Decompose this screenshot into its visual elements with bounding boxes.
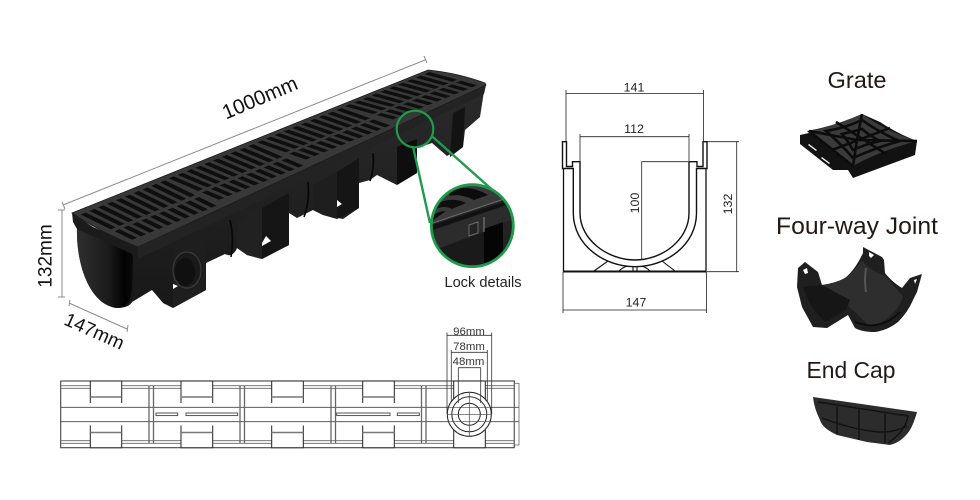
plan slots [156,413,419,416]
plan outline and longitudinal lines [61,381,519,448]
dimension line: length [62,56,427,209]
side rail [138,85,486,259]
dimension 100: 100 [628,193,642,213]
dimension 132: 132 [721,194,735,214]
outlet pipe socket [173,252,201,288]
label: 1000mm: 1000mm [219,72,301,124]
dimension 96mm: 96mm [453,326,485,338]
dimension 141: 141 [624,80,644,94]
grate slots [96,75,471,236]
dimension 147 [563,272,706,313]
plan outlet circles [447,392,492,437]
plan leg tabs [90,381,485,448]
leg cut-out gaps [173,200,342,289]
outer frame [564,169,706,272]
icon: four-way joint [797,247,922,332]
U channel profile [562,142,707,267]
small highlight circle [397,111,433,147]
dimension 48mm [453,356,484,403]
icon: grate piece [800,114,917,178]
foot supports [594,261,675,271]
magnified lock view [432,186,512,266]
open channel end [77,228,133,308]
callout connector lines [413,136,497,223]
dimension 147: 147 [626,296,646,310]
dimension 100 [628,162,688,260]
dimension 78mm: 78mm [453,341,485,353]
icon: end cap [813,397,917,445]
plan tab inner bars [90,397,394,432]
dimension 48mm: 48mm [453,356,484,368]
grate top surface [72,70,486,247]
channel legs [173,107,465,308]
infographic canvas [38,56,938,448]
dimension line: width [69,300,128,332]
product photo: channel drain body with grate [72,70,486,308]
label: 132mm: 132mm [36,224,56,288]
base plate [563,270,706,272]
near-end lip [72,213,138,259]
channel body silhouette [77,85,485,308]
lock detail callout [397,111,515,268]
heading: Four-way Joint: Four-way Joint [776,213,938,240]
cross-section drawing [562,80,739,313]
dimension 132 [707,142,739,272]
plan view drawing [61,326,519,448]
dimension 78mm [451,341,487,402]
magnifier ring [431,185,513,267]
dimension 112: 112 [624,122,644,136]
dimension 141 [566,80,704,142]
plan cross bars [149,386,426,443]
body ribs [230,153,373,257]
label: 147mm: 147mm [61,310,127,354]
heading: End Cap: End Cap [806,357,896,383]
dimension 96mm [447,326,492,414]
dimension line: height [58,210,65,297]
dimension 112 [580,122,689,162]
label: lock details: Lock details [444,275,522,291]
heading: Grate: Grate [828,67,886,93]
